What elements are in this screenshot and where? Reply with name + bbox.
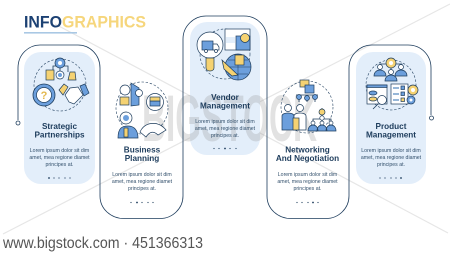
- heading: Networking And Negotiation: Networking: [285, 146, 330, 154]
- text: panel 2 body: principes at.: [128, 186, 156, 192]
- heading: Strategic Partnerships: Strategic: [42, 122, 77, 131]
- text: panel 3 body: amet, mea regione diamet: [195, 126, 256, 132]
- pagination dots 4: [296, 202, 319, 203]
- text: panel 4 body: principes at.: [294, 186, 321, 192]
- pagination dots 1: [48, 177, 71, 179]
- heading: Vendor Management: Vendor: [211, 93, 240, 102]
- text: panel 4 body: amet, mea regione diamet: [277, 179, 338, 185]
- text: panel 5 body: principes at.: [377, 162, 405, 168]
- heading: Networking And Negotiation: And Negotiation: [276, 154, 339, 163]
- text: panel 3 body: principes at.: [211, 133, 239, 139]
- text: panel 1 body: amet, mea regione diamet: [29, 155, 90, 161]
- icon: business planning: [116, 82, 168, 138]
- heading: Vendor Management: Management: [200, 102, 250, 110]
- heading: Product Management: Product: [376, 122, 407, 131]
- icon: vendor management: [197, 29, 251, 80]
- icon: strategic partnerships: ?: [41, 90, 48, 102]
- title: INFOGRAPHICS: [24, 14, 146, 32]
- text: panel 1 body: principes at.: [46, 162, 73, 168]
- icon: strategic partnerships: [33, 58, 89, 111]
- text: panel 2 body: amet, mea regione diamet: [112, 179, 173, 185]
- start dot: [16, 121, 20, 125]
- heading: Product Management: Management: [366, 130, 416, 140]
- watermark url: www.bigstock.com · 451366313: [2, 235, 203, 252]
- heading: Business Planning: Planning: [125, 154, 159, 163]
- pagination dots 2: [130, 202, 154, 203]
- heading: Strategic Partnerships: Partnerships: [34, 130, 85, 140]
- heading: Business Planning: Business: [124, 146, 161, 154]
- icon: product management: [366, 58, 418, 110]
- text: panel 1 body: Lorem ipsum dolor sit dim: [30, 148, 89, 154]
- connecting outline ribbon: [18, 16, 431, 218]
- text: panel 2 body: Lorem ipsum dolor sit dim: [112, 172, 172, 178]
- text: panel 3 body: Lorem ipsum dolor sit dim: [195, 119, 255, 125]
- pagination dots 3: [213, 148, 237, 149]
- icon: networking and negotiation: [281, 80, 336, 133]
- text: panel 5 body: amet, mea regione diamet: [361, 155, 422, 161]
- text: panel 4 body: Lorem ipsum dolor sit dim: [278, 172, 337, 178]
- pagination dots 5: [379, 177, 402, 179]
- panel backgrounds: [24, 22, 426, 184]
- end dot: [430, 116, 434, 120]
- text: panel 5 body: Lorem ipsum dolor sit dim: [361, 148, 421, 154]
